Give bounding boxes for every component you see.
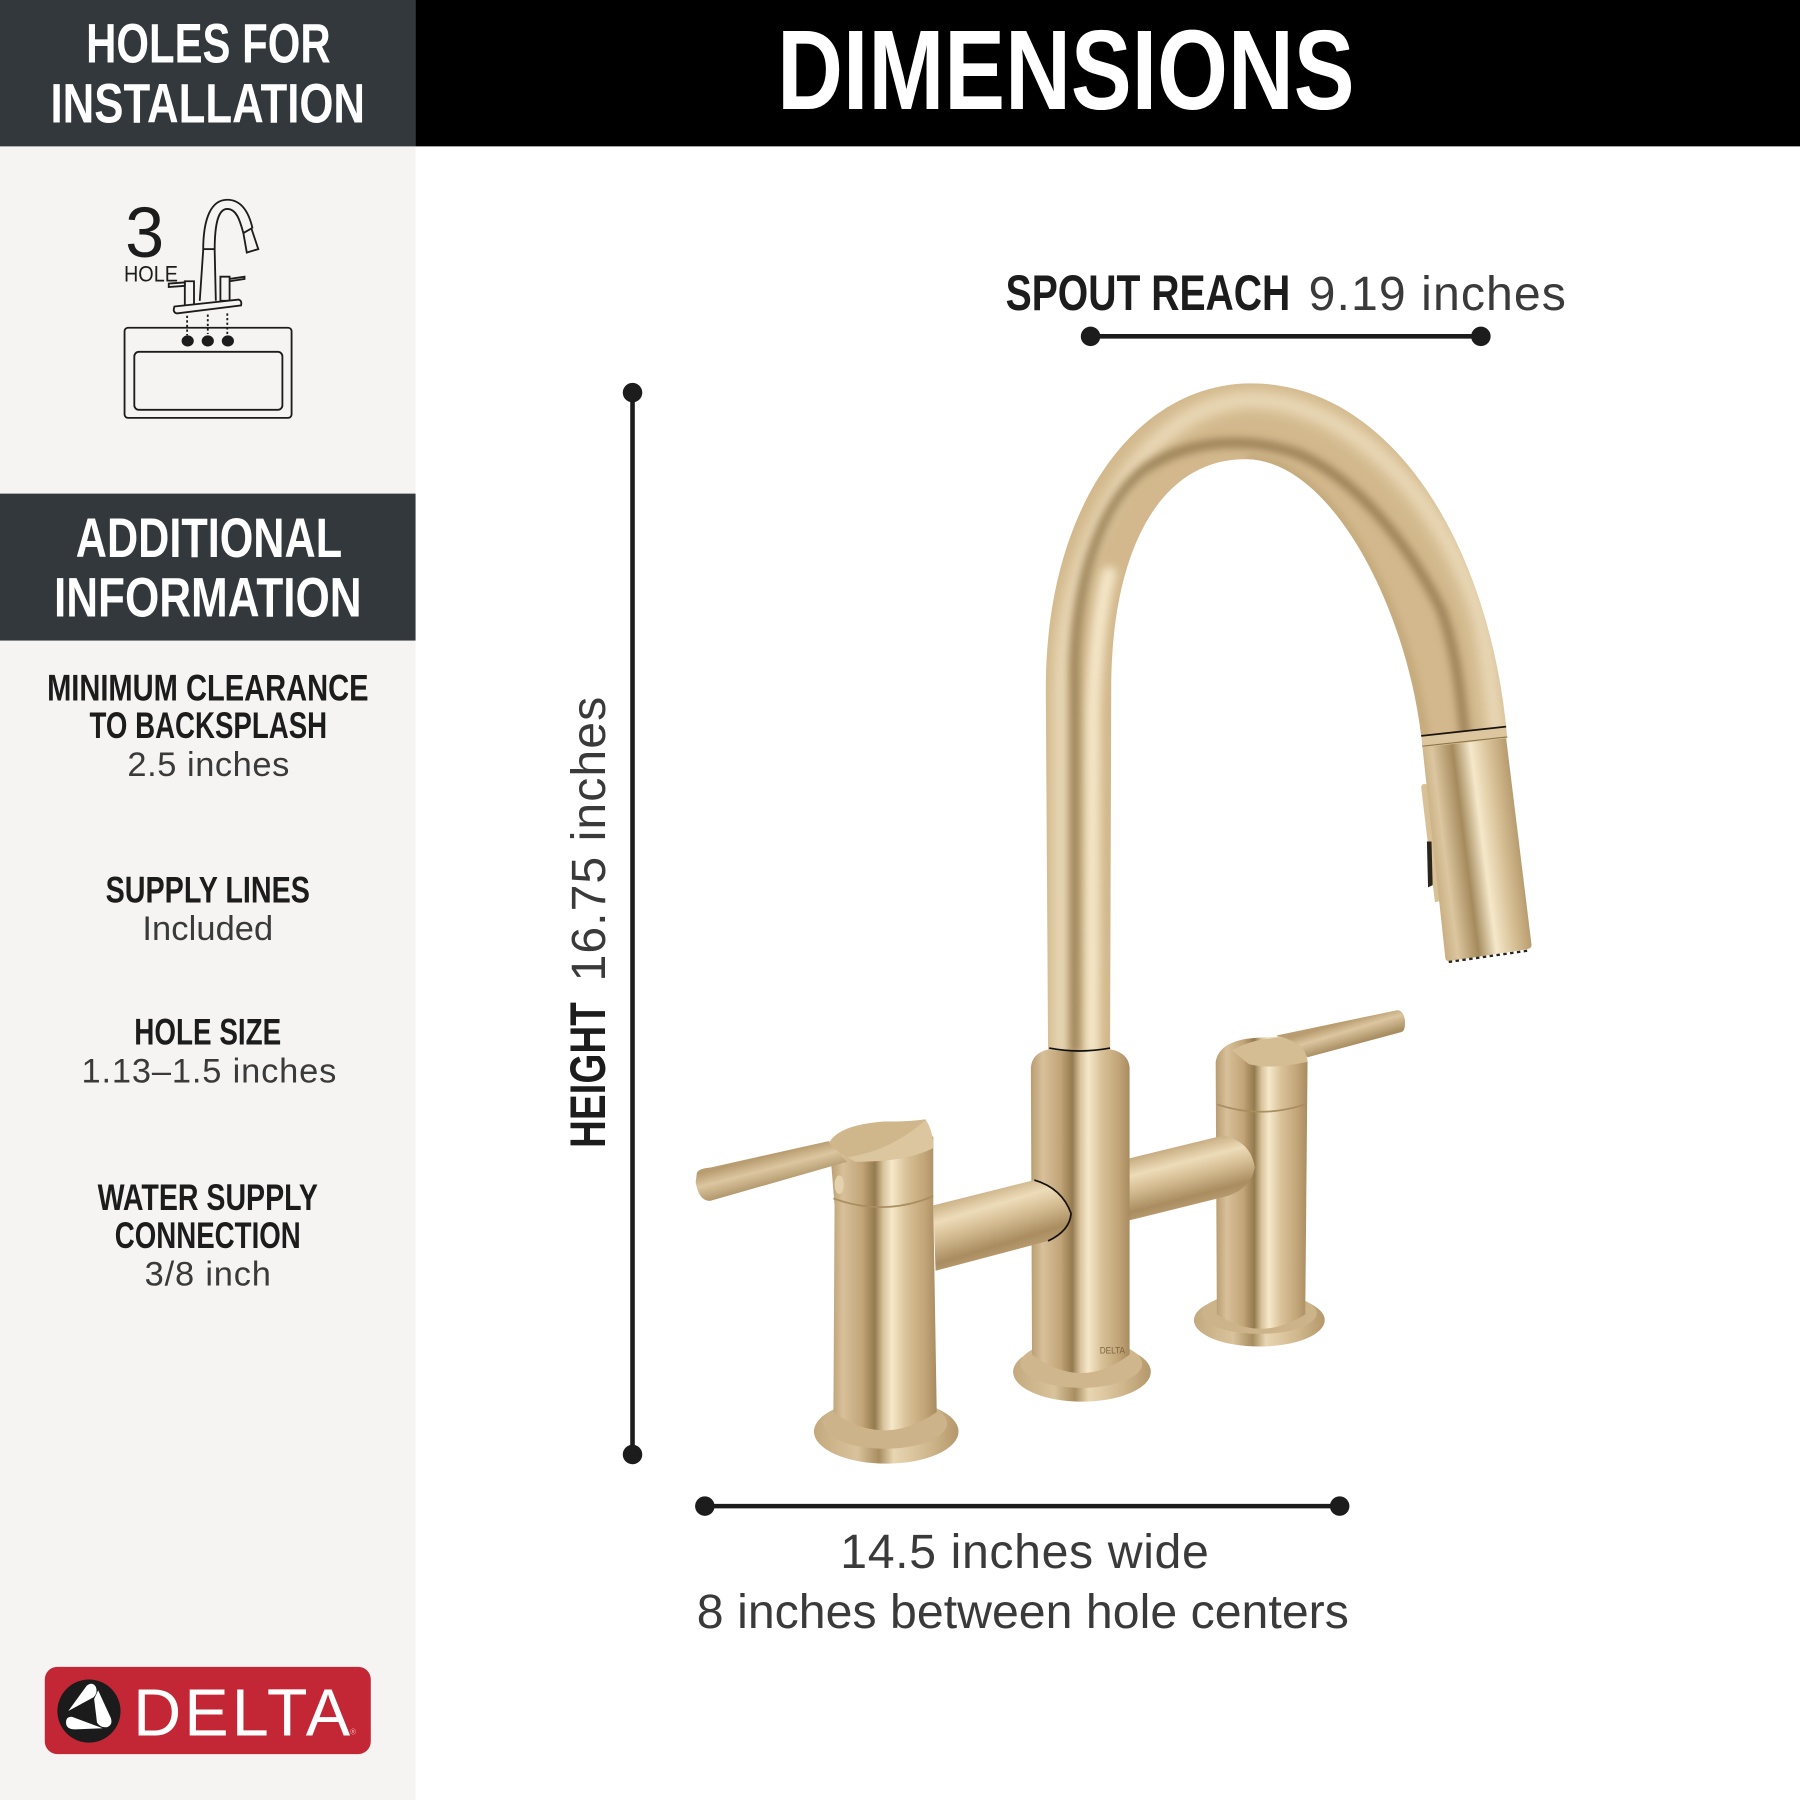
info: minimum clearance	[47, 667, 368, 784]
dimension: width: 8 inches between hole centers	[697, 1585, 1349, 1639]
icon: 3 hole faucet over sink: HOLE	[124, 261, 178, 286]
sidebar panel	[0, 0, 416, 1800]
heading: additional information	[0, 494, 416, 641]
title banner: dimensions: DIMENSIONS	[777, 7, 1355, 134]
info: supply lines	[106, 869, 310, 948]
heading: holes for installation: INSTALLATION	[51, 72, 365, 134]
info: minimum clearance: MINIMUM CLEARANCE	[47, 667, 368, 708]
info: hole size: 1.13–1.5 inches	[82, 1053, 336, 1091]
info: hole size: HOLE SIZE	[134, 1012, 281, 1053]
title banner: dimensions	[416, 0, 1800, 146]
logo: delta: DELTA	[133, 1677, 351, 1751]
info: water supply connection: 3/8 inch	[145, 1256, 271, 1294]
dimension: spout reach	[1006, 264, 1566, 346]
right handle	[1194, 1010, 1405, 1347]
info: minimum clearance: TO BACKSPLASH	[90, 705, 327, 746]
spray head	[1421, 727, 1532, 962]
left crossbar	[933, 1180, 1071, 1271]
left handle	[696, 1119, 959, 1464]
info: supply lines: Included	[142, 910, 273, 948]
heading: holes for installation: HOLES FOR	[86, 13, 331, 75]
heading: additional information: INFORMATION	[54, 566, 362, 628]
info: hole size	[82, 1012, 336, 1091]
faucet illustration	[696, 383, 1532, 1464]
logo: delta: ®	[350, 1728, 356, 1737]
heading: additional information: ADDITIONAL	[76, 507, 342, 569]
dimension: height	[559, 383, 642, 1464]
spout	[1046, 383, 1506, 1051]
dimension: height: HEIGHT	[559, 1002, 616, 1148]
dimension: spout reach: SPOUT REACH	[1006, 264, 1290, 321]
info: water supply connection	[98, 1177, 318, 1294]
heading: holes for installation	[0, 0, 416, 146]
center body: DELTA	[1100, 1345, 1126, 1355]
icon: 3 hole faucet over sink	[124, 194, 292, 418]
right crossbar	[1125, 1135, 1255, 1221]
icon: 3 hole faucet over sink: 3	[125, 194, 164, 273]
center body	[1013, 1049, 1151, 1402]
info: water supply connection: CONNECTION	[115, 1215, 301, 1256]
dimension: width	[695, 1496, 1349, 1639]
dimension: height: 16.75 inches	[562, 697, 616, 982]
info: supply lines: SUPPLY LINES	[106, 869, 310, 910]
dimension: spout reach: 9.19 inches	[1309, 267, 1566, 321]
dimension: width: 14.5 inches wide	[840, 1525, 1209, 1579]
info: minimum clearance: 2.5 inches	[127, 746, 289, 784]
info: water supply connection: WATER SUPPLY	[98, 1177, 318, 1218]
logo: delta	[45, 1667, 371, 1754]
